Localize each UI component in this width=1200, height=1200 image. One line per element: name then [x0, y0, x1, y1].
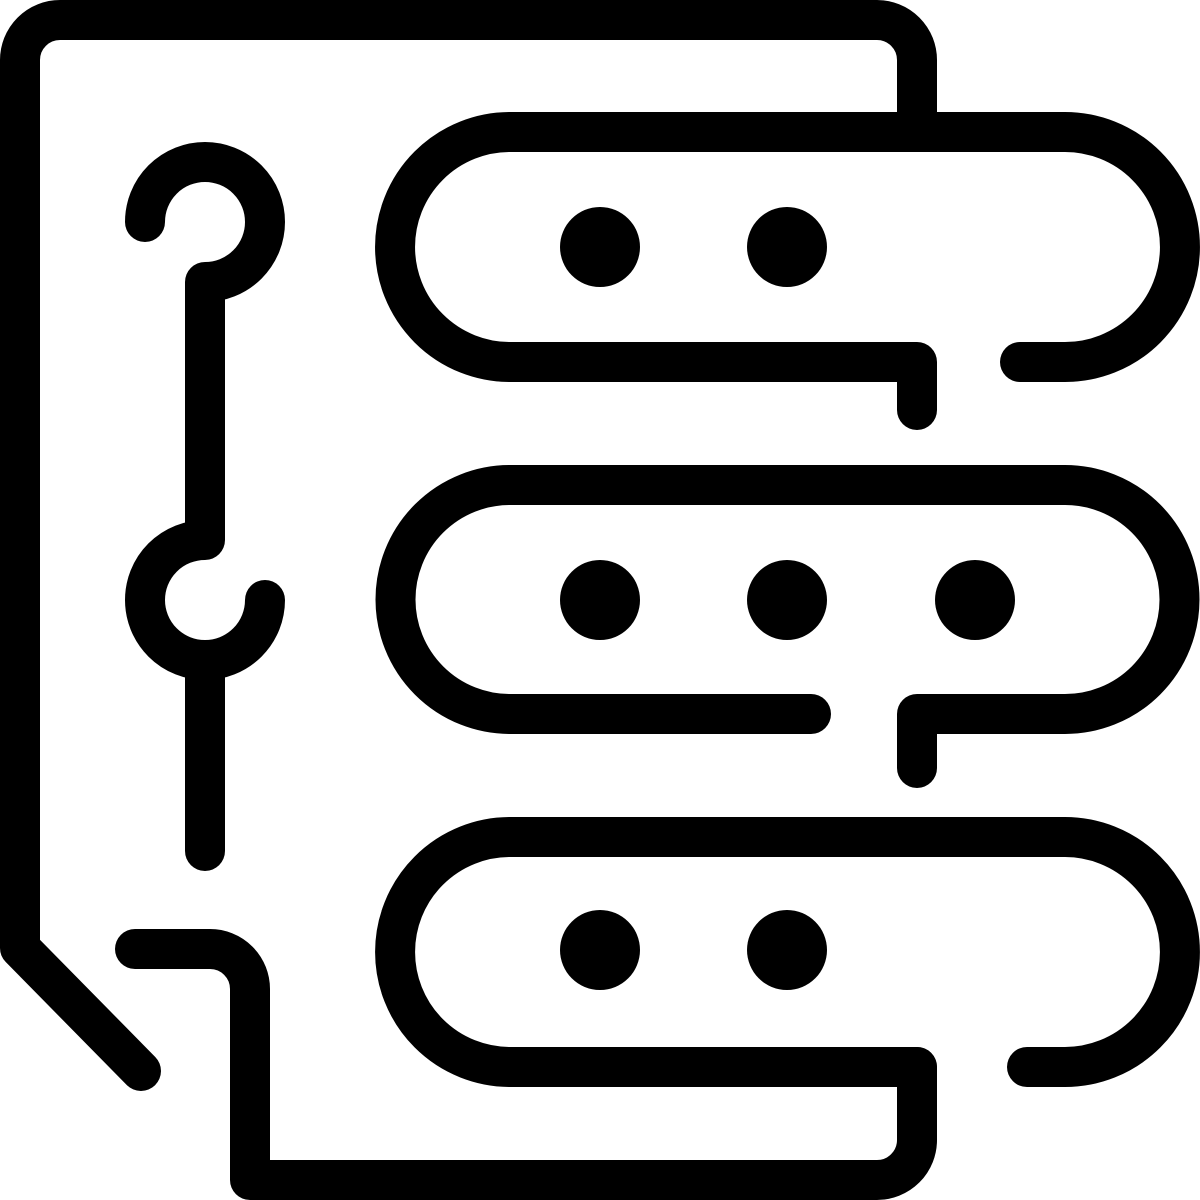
dots — [560, 207, 1015, 990]
page outline — [20, 20, 917, 1180]
chat bubble 2 — [396, 485, 1180, 768]
chat bubble 3 — [395, 837, 1180, 1067]
chat bubble 1 — [395, 132, 1180, 410]
question mark line — [145, 162, 265, 851]
